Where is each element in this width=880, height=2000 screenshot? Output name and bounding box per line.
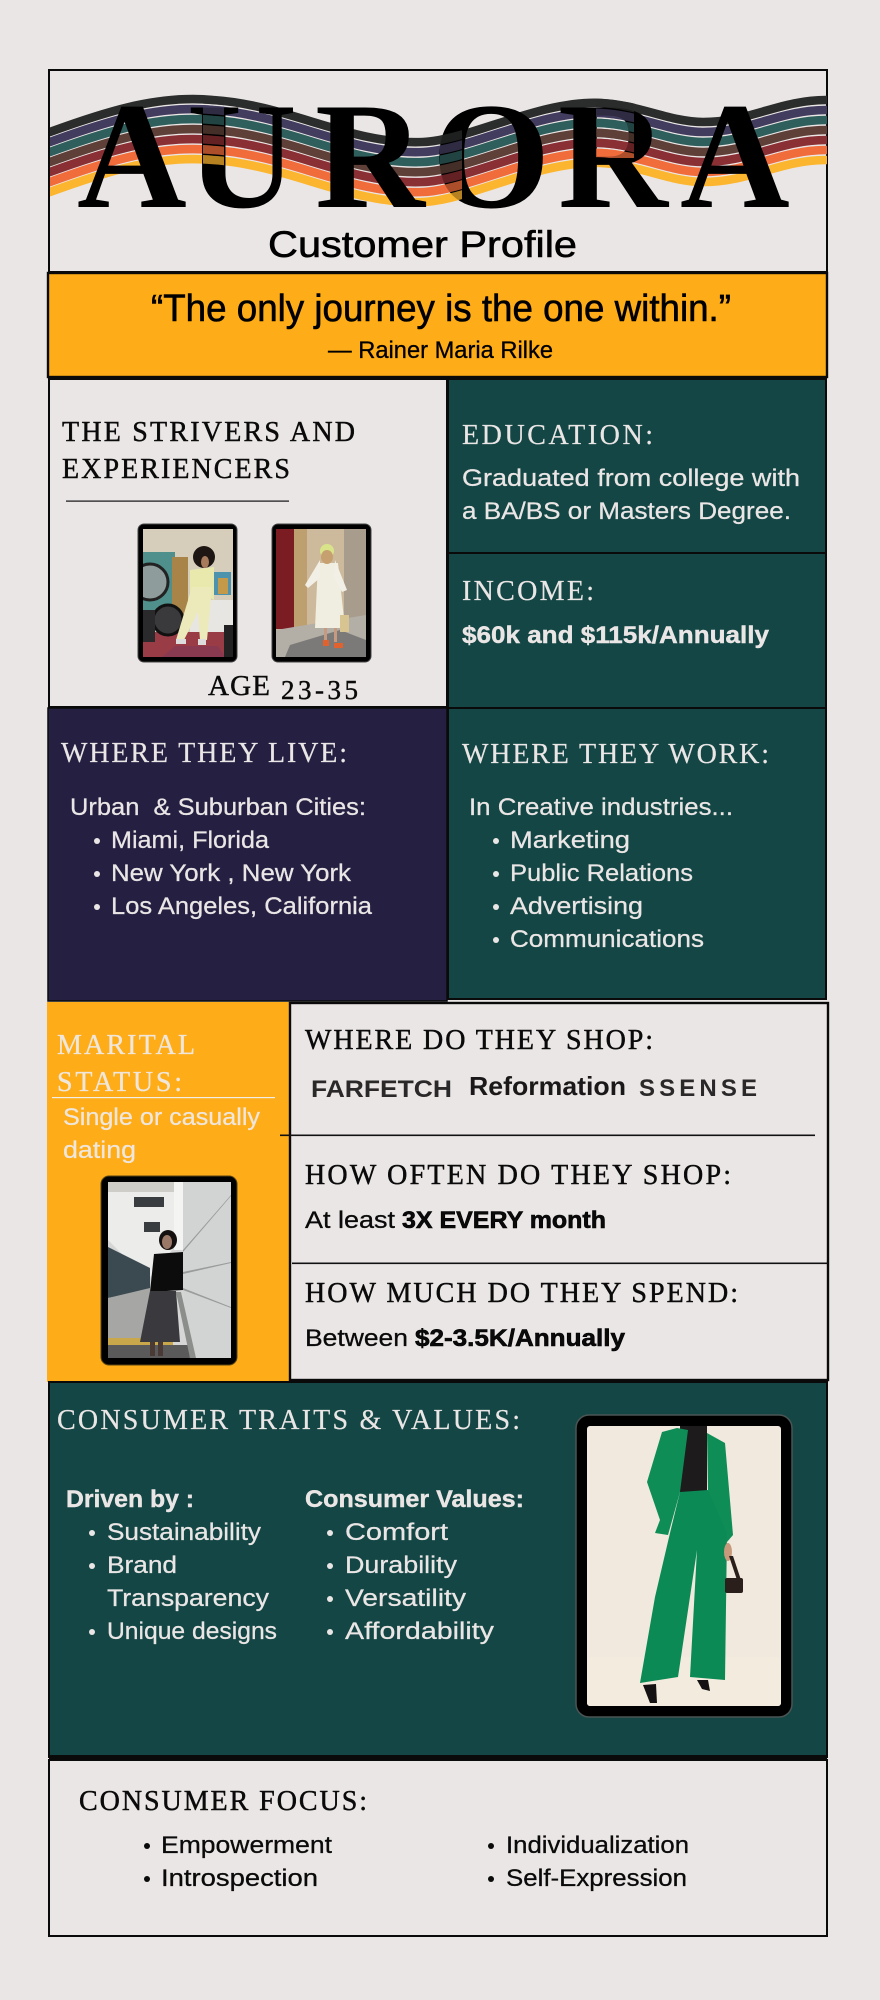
consumer values list: Durability: [345, 1552, 457, 1579]
how much text: $2-3.5K/Annually: [415, 1325, 626, 1352]
panel: consumer focus: [49, 1760, 827, 1936]
right focus list: Self-Expression: [506, 1865, 687, 1892]
tablet photo: green velvet suit: [576, 1415, 792, 1717]
left focus list: Empowerment: [161, 1832, 332, 1859]
how often text: At least: [305, 1207, 395, 1234]
how often text: 3X EVERY month: [402, 1207, 606, 1234]
brand logos: SSENSE: [639, 1075, 757, 1102]
industry list: Communications: [510, 926, 704, 953]
heading: EXPERIENCERS: [62, 454, 290, 485]
age label: AGE: [208, 670, 270, 702]
heading: CONSUMER FOCUS:: [79, 1786, 367, 1817]
brand logos: Reformation: [469, 1071, 626, 1101]
age label: 23-35: [281, 675, 358, 705]
how often heading: HOW OFTEN DO THEY SHOP:: [305, 1160, 731, 1191]
heading: MARITAL: [57, 1030, 195, 1061]
how much text: [305, 1325, 626, 1352]
right focus list: [488, 1832, 689, 1892]
driven by list: Brand: [107, 1552, 177, 1579]
intro text: In Creative industries...: [469, 794, 733, 821]
subtitle: Customer Profile: [268, 224, 577, 265]
quote attribution: — Rainer Maria Rilke: [328, 337, 553, 364]
education text: a BA/BS or Masters Degree.: [462, 498, 791, 525]
heading: [57, 1030, 195, 1098]
header panel: [49, 70, 827, 272]
panel: consumer traits and values: [49, 1382, 827, 1759]
tablet photo: woman in corridor: [101, 1176, 237, 1365]
marital text: Single or casually: [63, 1104, 260, 1131]
consumer values list: Comfort: [345, 1519, 448, 1546]
marital text: dating: [63, 1137, 136, 1164]
tablet photo: woman in white dress: [272, 524, 371, 662]
panel: where they work: [448, 708, 826, 999]
heading: STATUS:: [57, 1067, 182, 1098]
industry list: Marketing: [510, 827, 630, 854]
left focus list: [144, 1832, 332, 1892]
heading: WHERE THEY WORK:: [462, 739, 769, 770]
city list: [94, 827, 373, 920]
title: AURORA: AURORA: [77, 72, 790, 240]
panel: education: [448, 379, 826, 553]
panel: the strivers and experiencers: [49, 379, 447, 707]
education text: [462, 465, 800, 525]
how much heading: HOW MUCH DO THEY SPEND:: [305, 1278, 738, 1309]
ribbons overlaid on letter stems: [203, 98, 634, 204]
consumer values list: Affordability: [345, 1618, 494, 1645]
how often text: [305, 1207, 606, 1234]
panel: shopping: [280, 1003, 828, 1380]
heading: [62, 417, 355, 485]
how much text: Between: [305, 1325, 408, 1352]
heading: THE STRIVERS AND: [62, 417, 355, 448]
education heading: EDUCATION:: [462, 420, 653, 451]
city list: New York , New York: [111, 860, 352, 887]
tablet photo: woman with bicycle: [132, 524, 237, 662]
driven by list: Transparency: [107, 1585, 269, 1612]
quote text: “The only journey is the one within.”: [151, 288, 731, 330]
left focus list: Introspection: [161, 1865, 318, 1892]
wavy rainbow ribbons: [50, 99, 826, 202]
consumer values list: Consumer Values:: [305, 1486, 524, 1513]
heading: CONSUMER TRAITS & VALUES:: [57, 1405, 520, 1436]
brand logos: FARFETCH: [311, 1076, 452, 1103]
industry list: Public Relations: [510, 860, 693, 887]
industry list: Advertising: [510, 893, 643, 920]
intro text: Urban & Suburban Cities:: [70, 794, 366, 821]
city list: Los Angeles, California: [111, 893, 373, 920]
panel: marital status: [47, 1002, 290, 1382]
right focus list: Individualization: [506, 1832, 689, 1859]
heading: WHERE THEY LIVE:: [61, 738, 347, 769]
income value: $60k and $115k/Annually: [462, 622, 770, 649]
consumer values list: Versatility: [345, 1585, 466, 1612]
quote banner: [48, 273, 827, 377]
panel: where they live: [48, 708, 447, 1001]
industry list: [493, 827, 704, 953]
consumer values list: [305, 1486, 524, 1645]
city list: Miami, Florida: [111, 827, 270, 854]
driven by list: Driven by :: [66, 1486, 194, 1513]
driven by list: [66, 1486, 277, 1645]
income heading: INCOME:: [462, 576, 594, 607]
education text: Graduated from college with: [462, 465, 800, 492]
panel: income: [448, 553, 826, 708]
driven by list: Sustainability: [107, 1519, 261, 1546]
age label: [208, 670, 358, 705]
marital text: [63, 1104, 260, 1164]
where do they shop heading: WHERE DO THEY SHOP:: [305, 1025, 653, 1056]
driven by list: Unique designs: [107, 1618, 277, 1645]
brand logos: [311, 1071, 757, 1103]
